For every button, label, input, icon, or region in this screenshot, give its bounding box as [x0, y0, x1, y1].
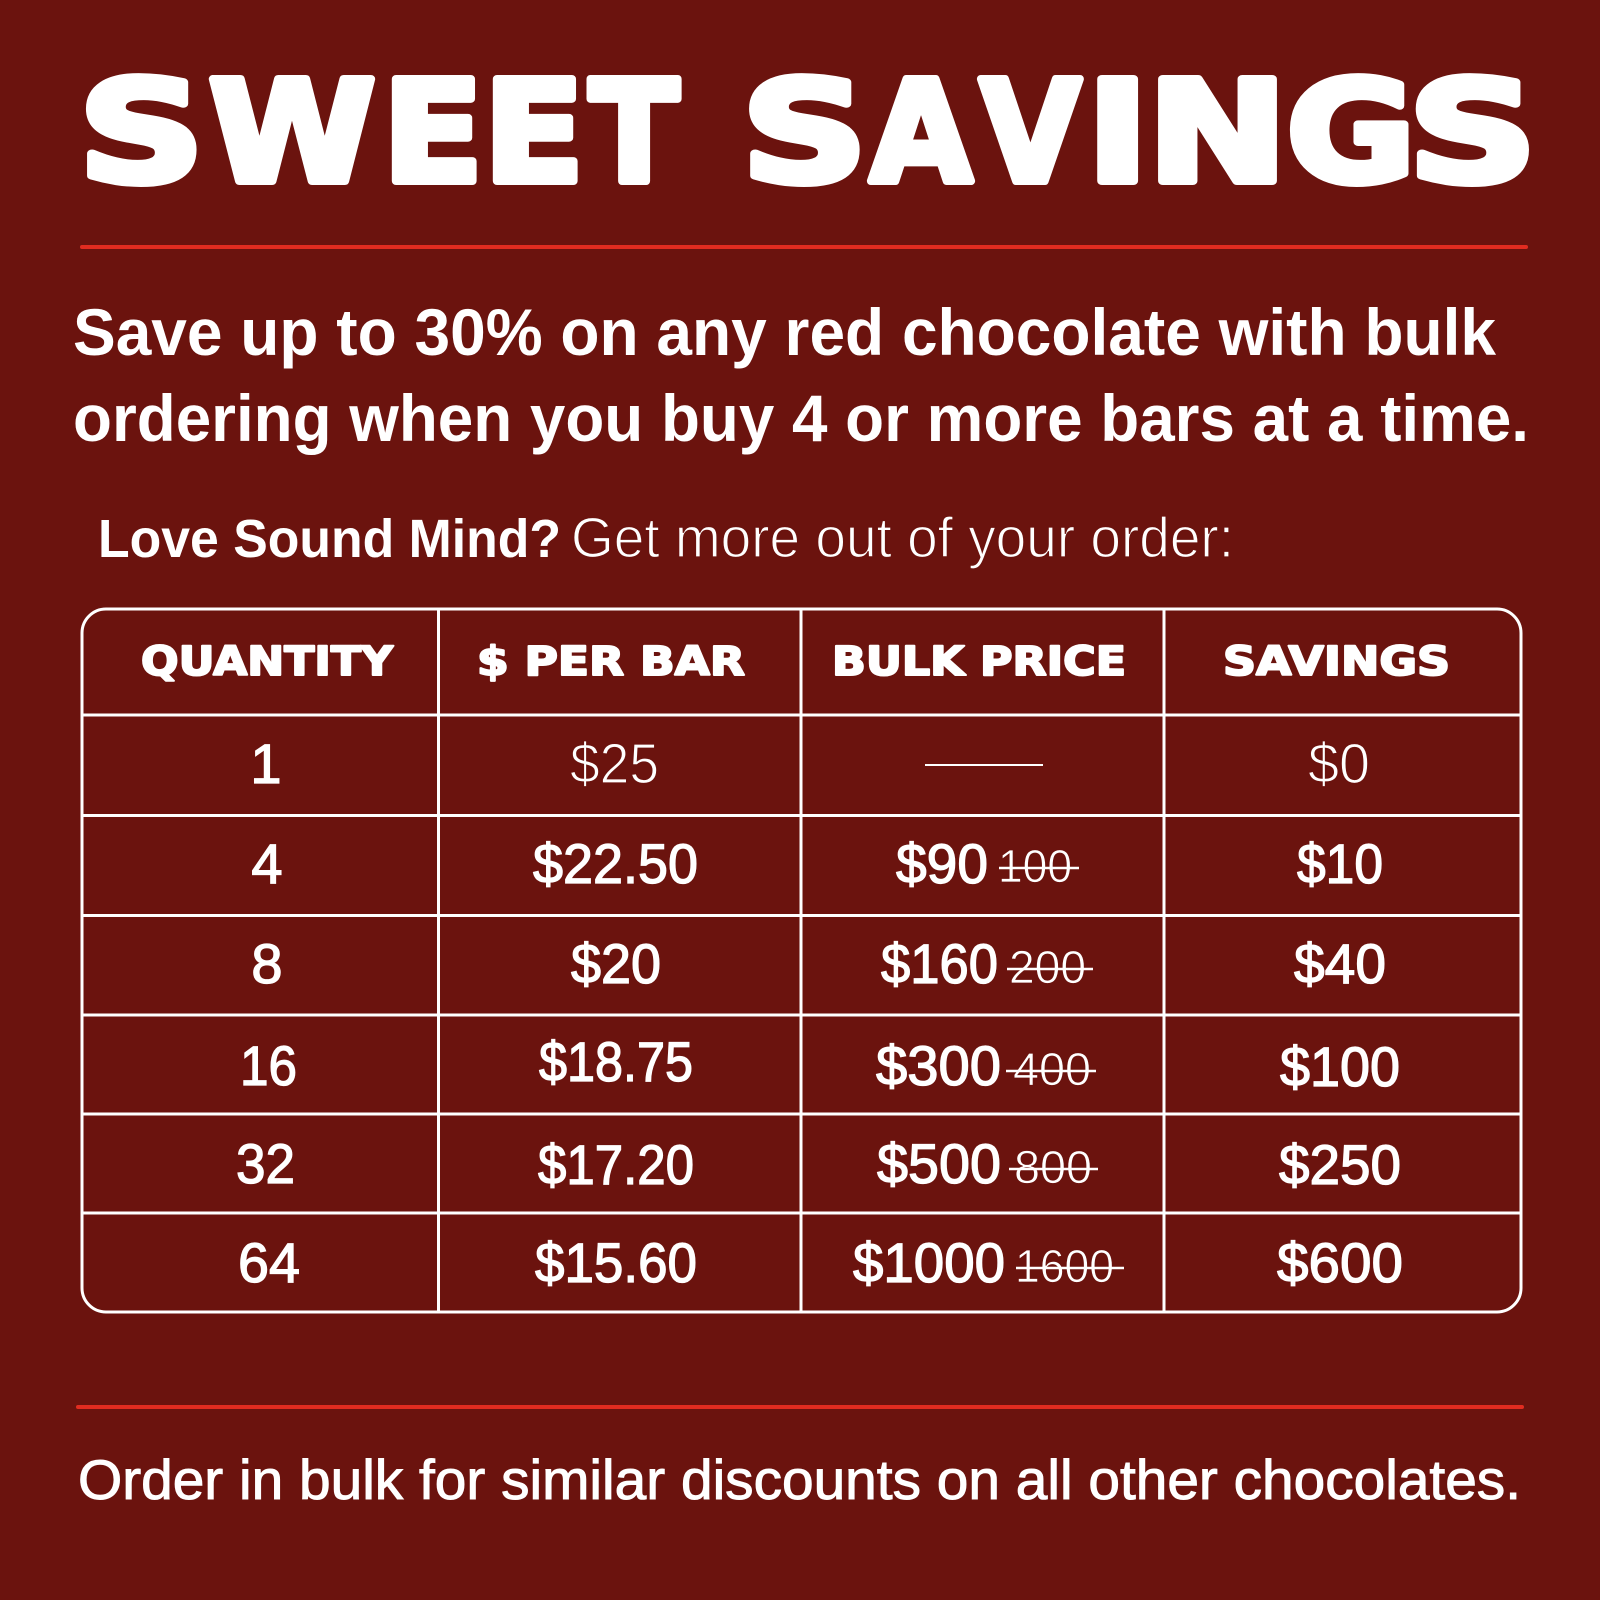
table intro line: Love Sound Mind? — [98, 509, 561, 569]
row: quantity 1: $25 — [570, 732, 659, 796]
row: quantity 32: 32 — [236, 1132, 295, 1195]
row: quantity 1: $0 — [1308, 732, 1370, 796]
title: S — [78, 52, 204, 215]
row: quantity 4: $10 — [1297, 832, 1383, 895]
row: quantity 64: $15.60 — [535, 1231, 697, 1294]
row: quantity 4 — [251, 832, 1383, 895]
title: I — [1087, 52, 1149, 215]
row: quantity 16 — [240, 1030, 1400, 1098]
title: N — [1148, 52, 1288, 215]
row: quantity 16: $100 — [1280, 1035, 1400, 1098]
row: quantity 64 — [238, 1231, 1403, 1294]
lead paragraph: ordering when you buy 4 or more bars at a time. — [73, 381, 1529, 455]
row: quantity 1: 1 — [250, 732, 282, 795]
lead paragraph: Save up to 30% on any red chocolate with bulk — [73, 295, 1496, 369]
row: quantity 4: 100 — [998, 840, 1072, 892]
row: quantity 1 — [250, 732, 1370, 796]
table header row: SAVINGS — [1223, 639, 1450, 685]
row: quantity 8 — [251, 932, 1386, 995]
row: quantity 4: $90 — [896, 832, 988, 895]
row: quantity 8: 8 — [251, 932, 283, 995]
title: T — [590, 52, 679, 215]
row: quantity 4: $22.50 — [533, 832, 698, 895]
table frame and grid — [82, 609, 1521, 1312]
row: quantity 64: $600 — [1277, 1231, 1403, 1294]
row: quantity 8: $160 — [881, 932, 998, 995]
table intro line: Get more out of your order: — [571, 506, 1234, 570]
title: E — [382, 52, 483, 215]
title: A — [870, 52, 972, 215]
row: quantity 16: $300 — [876, 1034, 1001, 1097]
row: quantity 8: $20 — [571, 932, 661, 995]
row: quantity 32 — [236, 1132, 1401, 1196]
table header row: $ PER BAR — [477, 639, 745, 685]
title: V — [980, 52, 1081, 215]
row: quantity 32: $17.20 — [538, 1133, 694, 1196]
row: quantity 4: 4 — [251, 832, 283, 895]
pricing table — [82, 609, 1521, 1312]
row: quantity 32: $500 — [877, 1132, 1001, 1195]
title: E — [484, 52, 584, 215]
row: quantity 16: $18.75 — [539, 1030, 693, 1093]
lead paragraph — [73, 295, 1529, 455]
title: S — [742, 52, 868, 215]
row: quantity 16: 16 — [240, 1034, 297, 1097]
table intro line — [98, 506, 1234, 570]
row: quantity 64: 1600 — [1015, 1240, 1114, 1292]
row: quantity 64: 64 — [238, 1231, 300, 1294]
footer note: Order in bulk for similar discounts on all other chocolates. — [78, 1448, 1521, 1511]
row: quantity 8: $40 — [1294, 932, 1386, 995]
table header row — [141, 639, 1450, 685]
row: quantity 8: 200 — [1009, 941, 1086, 993]
title: W — [209, 52, 376, 215]
row: quantity 32: 800 — [1014, 1141, 1092, 1193]
row: quantity 64: $1000 — [853, 1231, 1005, 1294]
title: G — [1287, 52, 1416, 215]
table header row: BULK PRICE — [832, 639, 1126, 685]
row: quantity 16: 400 — [1013, 1043, 1091, 1095]
row: quantity 32: $250 — [1279, 1133, 1401, 1196]
title: S — [1408, 52, 1537, 215]
table header row: QUANTITY — [141, 639, 394, 685]
